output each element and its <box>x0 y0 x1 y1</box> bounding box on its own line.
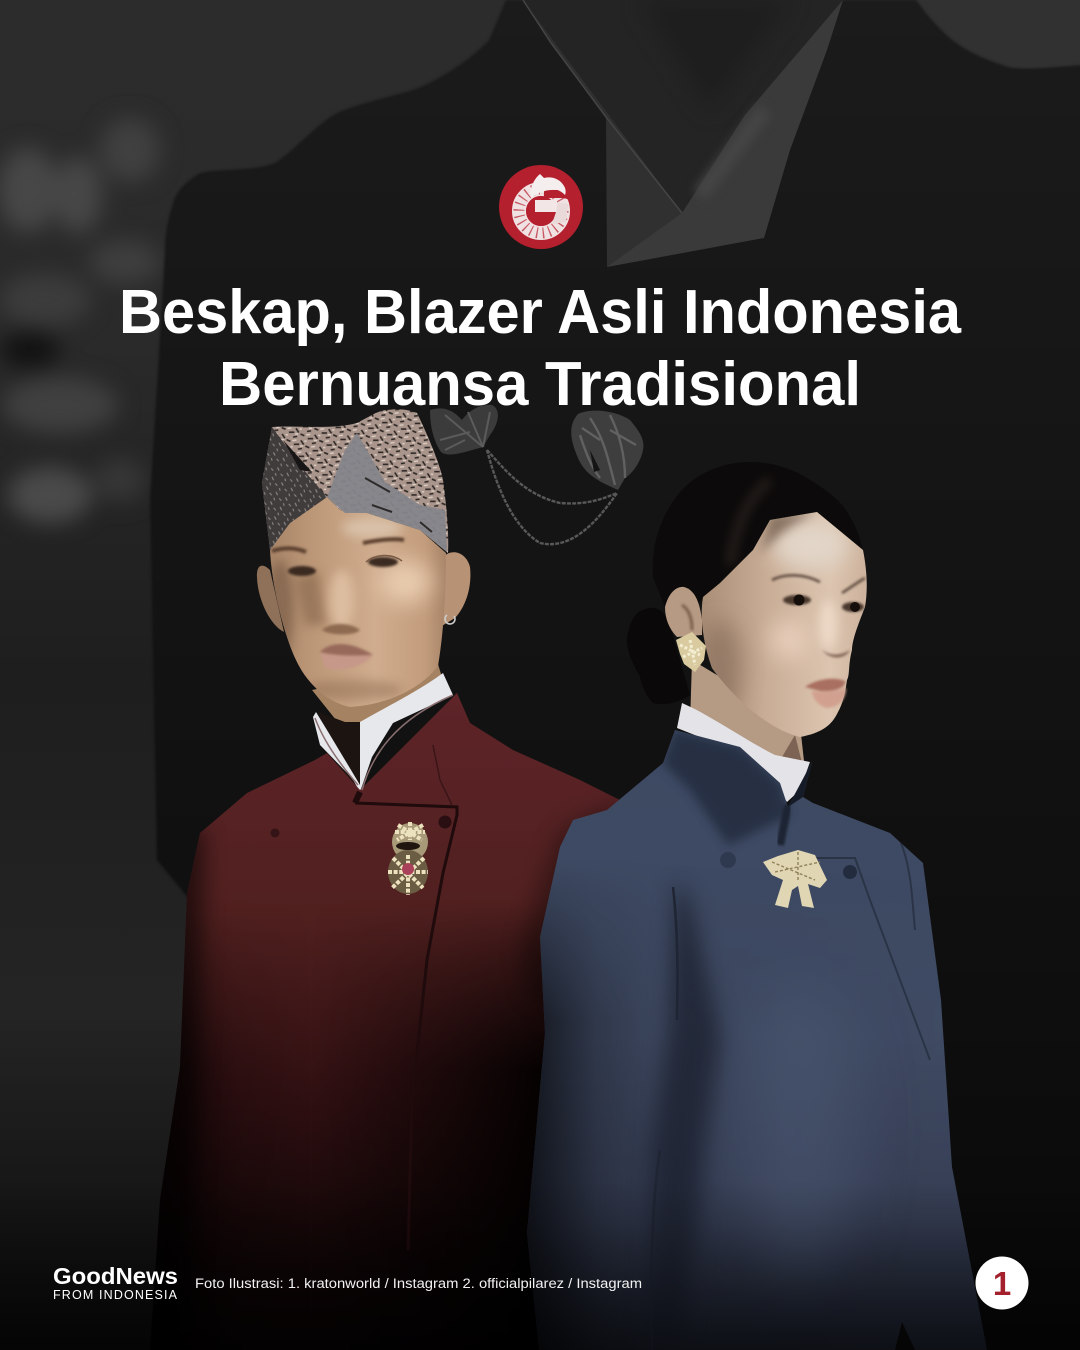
page number badge <box>976 1256 1028 1310</box>
placket seam <box>815 858 930 1060</box>
white collar <box>313 673 453 792</box>
collar seam <box>433 745 452 805</box>
nose <box>322 624 360 634</box>
maroon jacket outline highlights <box>315 695 453 790</box>
earring <box>445 615 455 624</box>
stand collar shading <box>663 730 790 845</box>
brand: GoodNews From Indonesia: FROM INDONESIA <box>53 1288 178 1302</box>
eyes <box>288 555 402 576</box>
face <box>702 512 867 737</box>
sleeve seam <box>652 887 679 1226</box>
page number badge: 1 <box>993 1265 1011 1302</box>
right leaf <box>571 411 643 490</box>
footer dark fade <box>0 1180 1080 1350</box>
eyes <box>783 594 864 612</box>
photo credit: Foto Ilustrasi: 1. kratonworld / Instagram 2. officialpilarez / Instagram <box>195 1276 642 1291</box>
ear <box>665 587 702 637</box>
hem slit <box>895 1322 915 1350</box>
earring <box>676 632 706 672</box>
left leaf <box>430 405 498 455</box>
right collar flap <box>607 0 843 267</box>
neck shadow <box>318 712 362 792</box>
brand: GoodNews From Indonesia: GoodNews <box>53 1263 178 1289</box>
chains <box>487 450 617 503</box>
shirt inner V <box>523 0 843 213</box>
nose <box>822 650 850 658</box>
buttons <box>438 816 452 828</box>
logo: red circle with white eagle G <box>499 165 583 249</box>
background chain brooch <box>430 405 643 544</box>
person: man in maroon beskap <box>140 409 630 1350</box>
brows <box>772 575 865 593</box>
bokeh lights on the left <box>0 118 161 523</box>
brand: GoodNews From Indonesia <box>53 1263 178 1302</box>
shading fold <box>646 880 722 1350</box>
left collar flap <box>523 0 682 267</box>
neck skin <box>312 664 444 745</box>
ear left <box>257 566 284 632</box>
person: woman in navy beskap <box>520 462 1000 1350</box>
title line 1: Beskap, Blazer Asli Indonesia <box>119 278 961 347</box>
right top grey area <box>916 0 1080 69</box>
brooch on maroon jacket <box>388 822 428 895</box>
hair bun <box>627 608 690 704</box>
placket seam <box>355 803 457 1250</box>
title line 2: Bernuansa Tradisional <box>219 350 861 419</box>
brooch on navy jacket <box>763 850 827 908</box>
brows <box>272 539 404 552</box>
title <box>119 278 961 419</box>
lips <box>805 679 846 708</box>
buttons <box>720 852 736 868</box>
lips <box>320 644 373 670</box>
ear right <box>440 552 470 627</box>
hair <box>653 462 863 620</box>
navy jacket body <box>520 720 1000 1350</box>
white collar <box>677 703 810 802</box>
face <box>270 497 446 707</box>
maroon jacket body <box>154 693 620 1310</box>
hat: batik blangkon <box>262 409 448 553</box>
neck <box>690 660 805 800</box>
